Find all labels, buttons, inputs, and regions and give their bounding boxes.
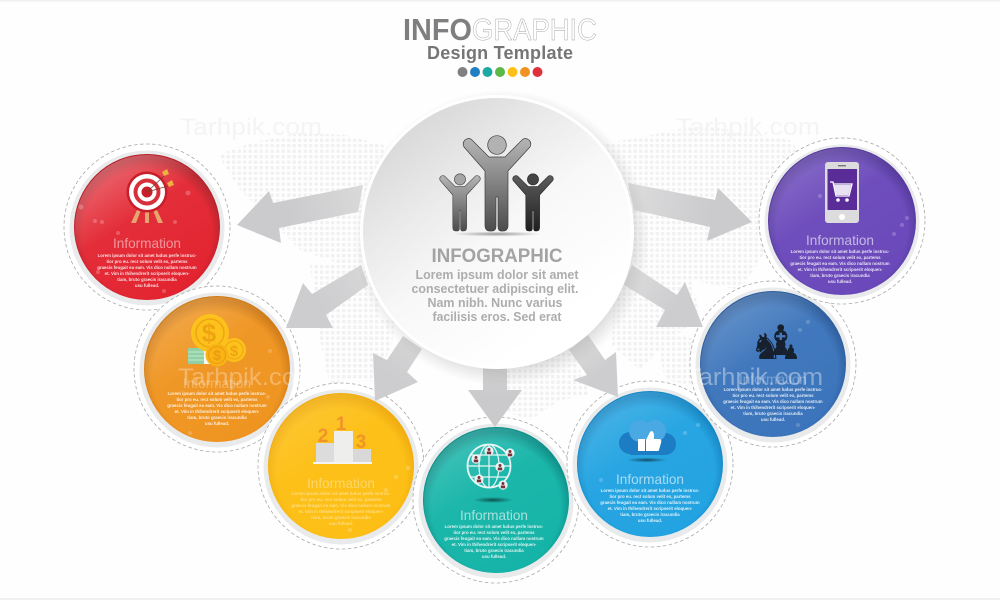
watermark top left: Tarhpik.com — [180, 114, 322, 141]
panel: yellow podium — [258, 383, 424, 549]
ring: dark blue — [690, 281, 856, 447]
text block: yellow: et. Vim in thihendrerit scripserit eloquen- — [299, 509, 384, 514]
heading: centre: INFOGRAPHIC — [432, 246, 563, 267]
disc: orange — [144, 296, 290, 442]
person: large — [463, 136, 531, 231]
disc: yellow — [268, 393, 414, 539]
text block: orange: tiam, bruto graecis iracundia — [187, 415, 247, 420]
panel: purple phone — [759, 138, 925, 304]
ring: blue — [567, 381, 733, 547]
text block: teal: tior pro eu. rect solum velit ex, partems — [453, 530, 535, 535]
text block: teal: Lorem ipsum dolor sit amet ludus perfe instruc- — [445, 524, 544, 529]
watermark over dark blue: Tarhpik.com — [686, 364, 823, 391]
person: small left — [440, 174, 480, 231]
ring: orange — [134, 286, 300, 452]
text block: teal: graecis feugait ea eam. Vis dico nullam nostrum — [444, 536, 544, 541]
text block: red: et. Vim in thihendrerit scripserit eloquen- — [105, 271, 190, 276]
arrow: to dark blue — [624, 265, 703, 327]
watermark top right: Tarhpik.com — [676, 114, 820, 141]
text block: yellow: tiam, bruto graecis iracundia — [311, 515, 371, 520]
icon: coins and banknotes: $ — [213, 347, 221, 363]
ring: teal — [413, 417, 579, 583]
heading: red: Information — [113, 236, 181, 251]
icon: podium — [313, 414, 372, 464]
panel: teal globe — [413, 417, 579, 583]
icon: chess pieces: ♞ — [750, 327, 782, 368]
text block: yellow: graecis feugait ea eam. Vis dico nullam nostrum — [291, 503, 391, 508]
text block: blue: usu fullead. — [638, 518, 662, 523]
text block: orange: et. Vim in thihendrerit scripserit eloquen- — [175, 409, 260, 414]
text block: orange: Lorem ipsum dolor sit amet ludus perfe instruc- — [168, 391, 267, 396]
heading: dark blue: Information — [739, 372, 807, 387]
person: small right — [513, 174, 553, 231]
panel: red target — [64, 144, 230, 310]
icon: coins and banknotes: $ — [230, 343, 239, 360]
arrow: to orange — [286, 265, 368, 328]
text block: purple: usu fullead. — [828, 279, 852, 284]
text block: dark blue: graecis feugait ea eam. Vis dico nullam nostrum — [723, 399, 823, 404]
icon: podium: 2 — [318, 426, 328, 447]
text block: dark blue: tior pro eu. rect solum velit ex, partems — [732, 393, 814, 398]
disc: dark blue — [700, 291, 846, 437]
text block: yellow: Lorem ipsum dolor sit amet ludus perfe instruc- — [292, 491, 391, 496]
text block: red: usu fullead. — [135, 283, 159, 288]
text block: dark blue: tiam, bruto graecis iracundia — [743, 411, 803, 416]
ring: yellow — [258, 383, 424, 549]
ring: purple — [759, 138, 925, 304]
title — [403, 12, 597, 47]
icon: chess pieces: ♝ — [762, 316, 800, 365]
panel: blue cloud — [567, 381, 733, 547]
icon: coins and banknotes: $ — [202, 318, 217, 348]
text block: teal: tiam, bruto graecis iracundia — [464, 548, 524, 553]
colour dots — [458, 67, 542, 77]
text block: blue: et. Vim in thihendrerit scripserit eloquen- — [608, 506, 693, 511]
text block: orange: usu fullead. — [205, 421, 229, 426]
centre circle disc — [354, 90, 650, 386]
heading: purple: Information — [806, 233, 874, 248]
text block: centre: Lorem ipsum dolor sit amet — [416, 267, 579, 282]
heading: blue: Information — [616, 472, 684, 487]
text block: centre — [412, 267, 579, 324]
text block: blue: tior pro eu. rect solum velit ex, partems — [609, 494, 691, 499]
disc: blue — [577, 391, 723, 537]
heading: teal: Information — [460, 508, 528, 523]
dotted world map — [218, 125, 815, 420]
heading: orange: Information — [183, 376, 251, 391]
arrow: to yellow — [373, 336, 422, 401]
disc: purple — [768, 147, 916, 295]
arrow: to red — [237, 185, 363, 243]
text block: purple: tiam, bruto graecis iracundia — [810, 273, 870, 278]
icon: cloud with thumbs up — [619, 420, 676, 462]
icon: three people — [440, 136, 553, 236]
ring: red — [64, 144, 230, 310]
text block: red: graecis feugait ea eam. Vis dico nullam nostrum — [97, 265, 197, 270]
panel: centre circle — [354, 90, 650, 386]
text block: blue: tiam, bruto graecis iracundia — [620, 512, 680, 517]
text block: centre: facilisis eros. Sed erat — [432, 309, 562, 324]
text block: orange: graecis feugait ea eam. Vis dico nullam nostrum — [167, 403, 267, 408]
icon: podium: 3 — [356, 432, 366, 453]
text block: teal: et. Vim in thihendrerit scripserit eloquen- — [452, 542, 537, 547]
text block: purple: graecis feugait ea eam. Vis dico nullam nostrum — [790, 261, 890, 266]
text block: red: tiam, bruto graecis iracundia — [117, 277, 177, 282]
text block: dark blue: usu fullead. — [761, 417, 785, 422]
heading: yellow: Information — [307, 476, 375, 491]
subtitle: Design Template — [427, 43, 573, 63]
icon: globe with people — [468, 444, 515, 503]
text block: purple: et. Vim in thihendrerit scripserit eloquen- — [798, 267, 883, 272]
text block: blue: Lorem ipsum dolor sit amet ludus perfe instruc- — [601, 488, 700, 493]
text block: purple: Lorem ipsum dolor sit amet ludus perfe instruc- — [791, 249, 890, 254]
text block: yellow: usu fullead. — [329, 521, 353, 526]
icon: podium: 1 — [336, 414, 347, 435]
icon: chess pieces: ♟ — [782, 340, 800, 364]
arrow: to purple — [628, 183, 752, 241]
text block: purple: tior pro eu. rect solum velit ex, partems — [799, 255, 881, 260]
text block: orange: tior pro eu. rect solum velit ex, partems — [176, 397, 258, 402]
text block: red: tior pro eu. rect solum velit ex, partems — [106, 259, 188, 264]
disc: teal — [423, 427, 569, 573]
panel: dark blue chess — [690, 281, 856, 447]
arrow: to teal — [468, 365, 522, 427]
watermark over orange: Tarhpik.com — [178, 364, 318, 391]
text block: centre: consectetuer adipiscing elit. — [412, 281, 578, 296]
icon: phone with cart — [825, 162, 859, 223]
text block: dark blue: Lorem ipsum dolor sit amet ludus perfe instruc- — [724, 387, 823, 392]
disc: red — [74, 154, 220, 300]
text block: blue: graecis feugait ea eam. Vis dico nullam nostrum — [600, 500, 700, 505]
panel: orange coins — [134, 286, 300, 452]
arrow: to blue — [569, 335, 618, 397]
text block: teal: usu fullead. — [482, 554, 506, 559]
icon: coins and banknotes — [188, 314, 246, 366]
text block: centre: Nam nibh. Nunc varius — [428, 295, 562, 310]
title: GRAPHIC — [472, 12, 597, 47]
text block: red: Lorem ipsum dolor sit amet ludus perfe instruc- — [98, 253, 197, 258]
text block: yellow: tior pro eu. rect solum velit ex, partems — [300, 497, 382, 502]
title: INFO — [403, 12, 472, 47]
icon: target — [126, 169, 174, 223]
text block: dark blue: et. Vim in thihendrerit scripserit eloquen- — [731, 405, 816, 410]
